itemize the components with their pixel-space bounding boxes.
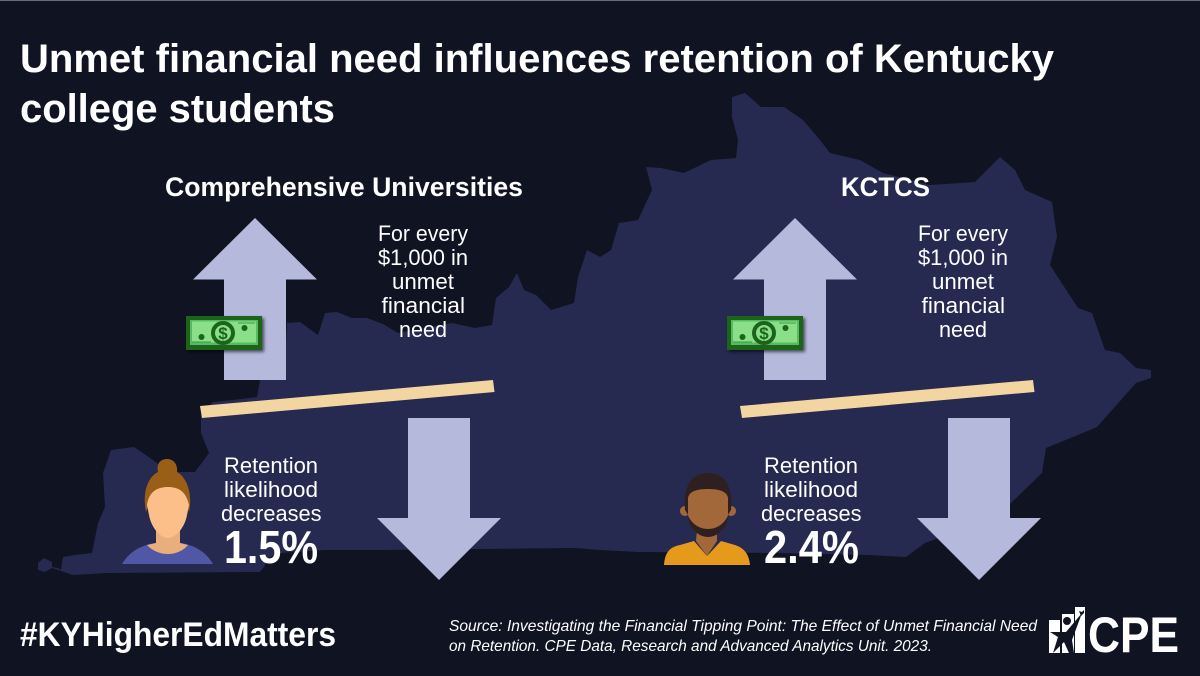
icon: woman <box>122 459 213 564</box>
text: retention likelihood: decreases <box>221 501 322 526</box>
text: for every $1,000: $1,000 in <box>918 245 1008 270</box>
balance beam <box>740 380 1034 418</box>
text: for every $1,000: $1,000 in <box>378 245 468 270</box>
source note <box>449 618 1038 655</box>
icon: dollar bill <box>186 316 262 350</box>
text: for every $1,000: For every <box>378 221 468 246</box>
panel: KCTCS <box>664 172 1041 580</box>
icon: man <box>664 473 750 565</box>
arrow: down <box>377 418 501 580</box>
text: retention likelihood: likelihood <box>764 477 858 502</box>
number: 1.5%: 1.5% <box>224 521 318 573</box>
text: for every $1,000: unmet <box>932 269 994 294</box>
arrow: down <box>917 418 1041 580</box>
title <box>20 37 1055 131</box>
hashtag: #KYHigherEdMatters <box>20 616 336 654</box>
source note: on Retention. CPE Data, Research and Advanced Analytics Unit. 2023. <box>449 638 932 655</box>
text: retention likelihood <box>221 453 322 526</box>
title: college students <box>20 87 335 131</box>
balance beam <box>200 380 494 418</box>
number: 2.4%: 2.4% <box>764 521 859 573</box>
text: for every $1,000 <box>378 221 468 342</box>
text: retention likelihood: decreases <box>761 501 862 526</box>
panel: Comprehensive Universities <box>122 172 523 580</box>
icon: CPE bars and figure <box>1049 607 1085 653</box>
text: for every $1,000 <box>918 221 1008 342</box>
text: for every $1,000: unmet <box>392 269 454 294</box>
arrow: up <box>733 218 857 380</box>
text: retention likelihood <box>761 453 862 526</box>
text: retention likelihood: likelihood <box>224 477 318 502</box>
text: for every $1,000: need <box>939 317 987 342</box>
text: retention likelihood: Retention <box>764 453 858 478</box>
heading: Comprehensive Universities: Comprehensive Universities <box>165 172 523 202</box>
logo: CPE: CPE <box>1088 607 1179 663</box>
icon: dollar bill <box>727 316 803 350</box>
top edge <box>0 0 1200 1</box>
text: for every $1,000: financial <box>382 293 465 318</box>
text: for every $1,000: need <box>399 317 447 342</box>
source note: Source: Investigating the Financial Tipping Point: The Effect of Unmet Financial Need <box>449 618 1038 635</box>
text: for every $1,000: financial <box>922 293 1005 318</box>
heading: KCTCS: KCTCS <box>841 172 930 202</box>
map: Kentucky silhouette <box>38 93 1151 575</box>
title: Unmet financial need influences retention of Kentucky <box>20 37 1055 81</box>
arrow: up <box>193 218 317 380</box>
text: retention likelihood: Retention <box>224 453 318 478</box>
text: for every $1,000: For every <box>918 221 1008 246</box>
logo: CPE <box>1049 607 1179 663</box>
